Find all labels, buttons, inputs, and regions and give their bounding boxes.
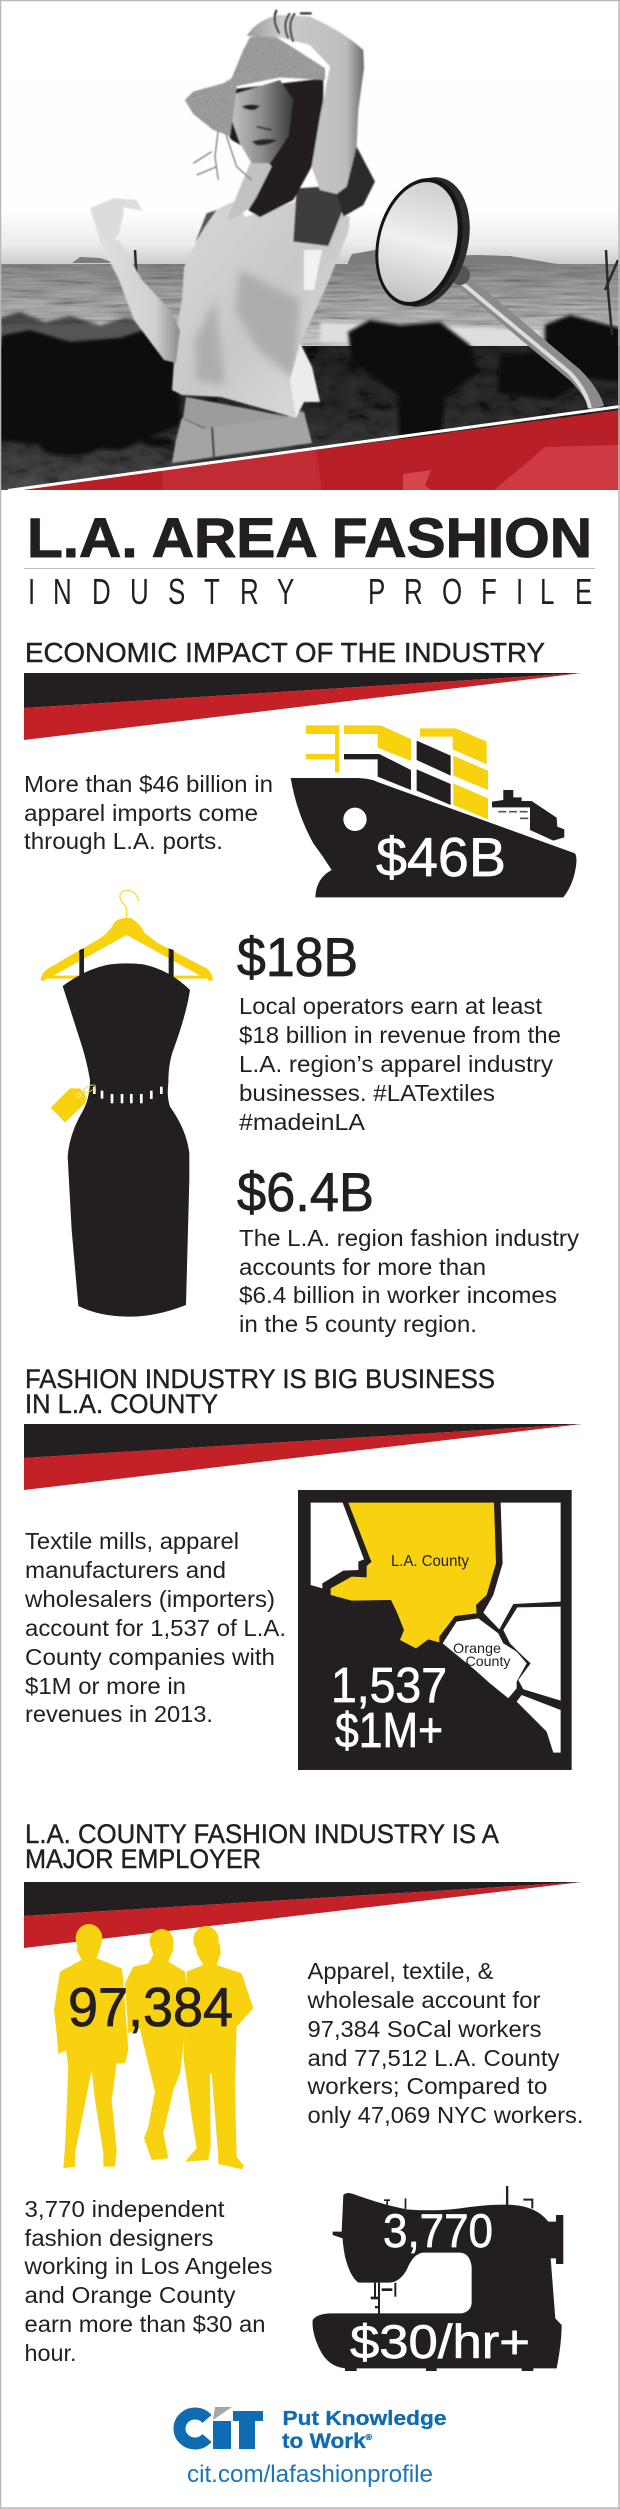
tagline: to Work <box>282 2430 360 2453</box>
text: revenue: $18 billion in revenue from the <box>239 1022 561 1048</box>
text: apparel imports <box>24 771 273 854</box>
heading: major employer: L.A. COUNTY FASHION INDUSTRY IS A <box>25 1819 499 1849</box>
text: textile mills: $1M or more in <box>25 1673 186 1699</box>
text: revenue: Local operators earn at least <box>239 993 543 1019</box>
text: worker incomes <box>239 1225 580 1337</box>
text: worker incomes: $6.4 billion in worker incomes <box>239 1282 557 1308</box>
text: worker comparison: and 77,512 L.A. County <box>308 2045 560 2071</box>
logo: CIT <box>180 2407 263 2449</box>
text: textile mills: Textile mills, apparel <box>25 1528 239 1554</box>
wedge banner 1 <box>24 673 582 740</box>
text: apparel imports: apparel imports come <box>24 800 258 826</box>
map: L.A. and Orange County: Orange <box>453 1640 501 1656</box>
text: textile mills: manufacturers and <box>25 1557 226 1583</box>
text: textile mills: County companies with <box>25 1644 275 1670</box>
map: L.A. and Orange County: $1M+ <box>335 1704 443 1758</box>
stat: $6.4B: $6.4B <box>237 1161 374 1223</box>
stat: $18B: $18B <box>237 926 358 988</box>
tagline: Put Knowledge <box>282 2408 446 2430</box>
red wedge <box>8 406 620 490</box>
text: independent designers: earn more than $30 an <box>24 2311 266 2337</box>
text: revenue: businesses. #LATextiles <box>239 1080 495 1106</box>
tagline: ® <box>366 2433 372 2442</box>
icon: sewing machine: 3,770 <box>383 2204 493 2257</box>
map: L.A. and Orange County: 1,537 <box>331 1659 447 1713</box>
icon: cargo ship: $46B <box>376 826 506 888</box>
text: revenue: L.A. region’s apparel industry <box>239 1051 554 1077</box>
photo: woman on beach with scooter mirror <box>0 0 620 490</box>
text: textile mills <box>24 1528 286 1727</box>
text: worker comparison: Apparel, textile, & <box>308 1958 494 1984</box>
heading: major employer <box>25 1819 499 1874</box>
heading: economic impact: ECONOMIC IMPACT OF THE INDUSTRY <box>25 637 545 668</box>
heading: big business <box>25 1364 495 1419</box>
text: textile mills: revenues in 2013. <box>25 1701 213 1727</box>
text: independent designers: and Orange County <box>24 2282 236 2308</box>
text: independent designers <box>23 2196 272 2366</box>
title: L.A. AREA FASHION <box>27 506 592 569</box>
subtitle: INDUSTRY PROFILE <box>28 572 592 612</box>
text: worker comparison: wholesale account for <box>306 1987 541 2013</box>
tagline <box>282 2408 446 2453</box>
icon: sewing machine <box>313 2186 563 2371</box>
text: worker incomes: The L.A. region fashion industry <box>239 1225 580 1251</box>
map: L.A. and Orange County: County <box>466 1653 510 1669</box>
heading: big business: IN L.A. COUNTY <box>25 1389 218 1419</box>
map: L.A. and Orange County: L.A. County <box>391 1553 469 1570</box>
scooter mirror <box>363 168 597 408</box>
text: apparel imports: through L.A. ports. <box>24 828 223 854</box>
text: apparel imports: More than $46 billion in <box>24 771 273 797</box>
icon: cargo ship <box>291 725 576 897</box>
text: revenue <box>239 993 561 1135</box>
text: worker comparison <box>306 1958 584 2128</box>
icon: three people silhouettes with count <box>54 1924 253 2169</box>
wedge banner 3 <box>24 1882 582 1948</box>
text: worker comparison: only 47,069 NYC workers. <box>308 2102 584 2128</box>
icon: sewing machine: $30/hr+ <box>350 2315 530 2368</box>
text: independent designers: hour. <box>24 2340 76 2366</box>
map: L.A. and Orange County <box>298 1490 572 1770</box>
website url: cit.com/lafashionprofile <box>187 2461 433 2488</box>
heading: major employer: MAJOR EMPLOYER <box>25 1844 261 1874</box>
icon: three people silhouettes with count: 97,384 <box>68 1976 233 2038</box>
text: revenue: #madeinLA <box>239 1109 366 1135</box>
text: textile mills: wholesalers (importers) <box>24 1586 275 1612</box>
wedge banner 2 <box>24 1424 582 1490</box>
text: worker comparison: workers; Compared to <box>306 2073 548 2099</box>
text: worker incomes: accounts for more than <box>239 1254 486 1280</box>
text: textile mills: account for 1,537 of L.A. <box>25 1615 286 1641</box>
heading: big business: FASHION INDUSTRY IS BIG BUSINESS <box>25 1364 495 1394</box>
text: worker comparison: 97,384 SoCal workers <box>308 2016 542 2042</box>
icon: dress on hanger <box>41 891 213 1317</box>
woman figure <box>90 10 375 463</box>
text: independent designers: 3,770 independent <box>24 2196 225 2222</box>
text: independent designers: working in Los Angeles <box>23 2253 272 2279</box>
text: independent designers: fashion designers <box>24 2225 214 2251</box>
text: worker incomes: in the 5 county region. <box>239 1311 477 1337</box>
